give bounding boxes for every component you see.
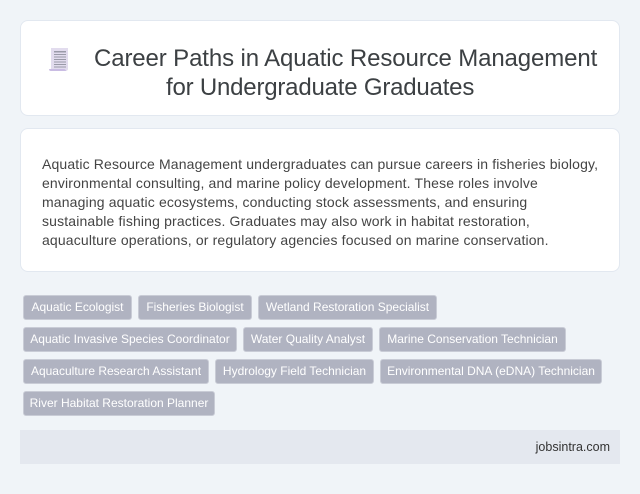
tag <box>138 295 252 320</box>
description text: aquaculture operations, or regulatory agencies focused on marine conservation. <box>42 232 549 248</box>
footer source text: jobsintra.com <box>536 440 610 454</box>
tag: Hydrology Field Technician <box>223 364 366 378</box>
description text: Aquatic Resource Management undergraduates can pursue careers in fisheries biology, <box>42 156 598 172</box>
tag: Marine Conservation Technician <box>387 332 558 346</box>
tag <box>258 295 437 320</box>
tag <box>23 295 132 320</box>
tag: Water Quality Analyst <box>251 332 365 346</box>
header panel <box>20 20 620 116</box>
description panel <box>20 128 620 272</box>
tag: Fisheries Biologist <box>146 300 244 314</box>
tag <box>379 327 566 352</box>
tag <box>215 359 374 384</box>
tag <box>23 359 209 384</box>
description text <box>42 156 598 248</box>
description text: managing aquatic ecosystems, conducting stock assessments, and ensuring <box>42 194 527 210</box>
tag: Aquatic Invasive Species Coordinator <box>30 332 230 346</box>
description text: sustainable fishing practices. Graduates may also work in habitat restoration, <box>42 213 530 229</box>
tag: Aquatic Ecologist <box>31 300 124 314</box>
title <box>94 45 598 101</box>
title: Career Paths in Aquatic Resource Management <box>94 45 597 72</box>
description text: environmental consulting, and marine policy development. These roles involve <box>42 175 538 191</box>
footer bar <box>20 430 620 464</box>
tag: Wetland Restoration Specialist <box>266 300 429 314</box>
title: for Undergraduate Graduates <box>166 74 474 101</box>
tag <box>23 391 215 416</box>
tag <box>23 327 237 352</box>
tag <box>243 327 373 352</box>
tag: Aquaculture Research Assistant <box>31 364 201 378</box>
icon: document scroll <box>49 48 68 71</box>
tag: Environmental DNA (eDNA) Technician <box>387 364 595 378</box>
tag: River Habitat Restoration Planner <box>30 396 208 410</box>
tag list: career roles <box>23 295 602 416</box>
tag <box>380 359 602 384</box>
